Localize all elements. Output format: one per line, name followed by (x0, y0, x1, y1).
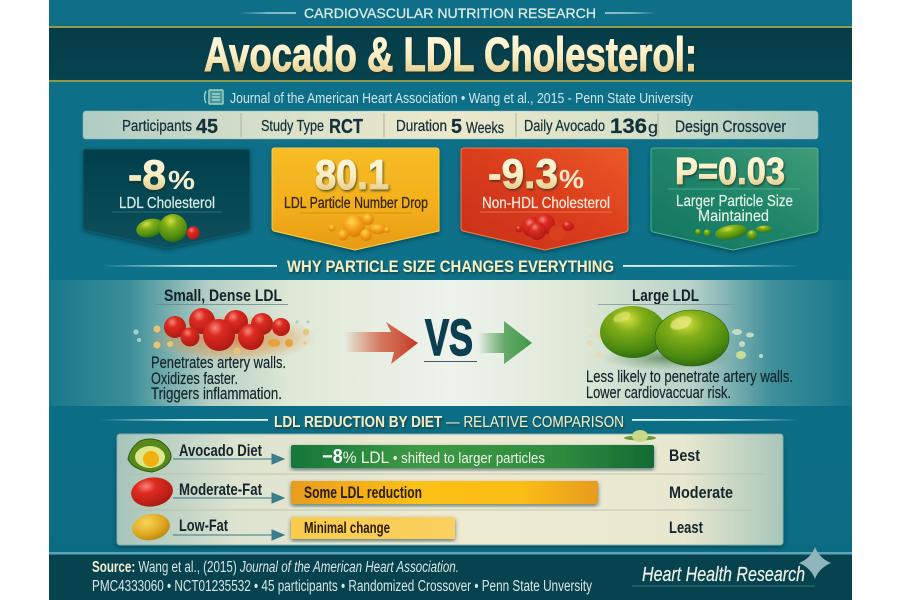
row: avocado diet: Avocado Diet (179, 441, 262, 460)
icon: sparkle (799, 547, 831, 579)
bar: avocado (291, 445, 654, 468)
bar: low-fat (291, 517, 455, 539)
stat: participants: Participants (122, 118, 192, 135)
card: non-HDL cholesterol: % (559, 164, 584, 194)
bar: avocado: −8% LDL • shifted to larger particles (322, 446, 545, 468)
small LDL description: Oxidizes faster. (151, 369, 238, 388)
icon: orange particles (328, 213, 390, 241)
small dense LDL (133, 286, 317, 403)
small LDL description: Penetrates artery walls. (151, 353, 286, 372)
kicker heading: CARDIOVASCULAR NUTRITION RESEARCH (304, 5, 596, 21)
small LDL description (151, 353, 286, 403)
arrow (173, 454, 284, 464)
section heading: LDL reduction: LDL REDUCTION BY DIET — RELATIVE COMPARISON (274, 414, 624, 431)
card: LDL particle number: 80.1 (315, 151, 389, 198)
card: non-HDL cholesterol: -9.3 (488, 150, 558, 197)
stat: daily avocado: 136 (610, 115, 647, 138)
large LDL (586, 286, 793, 402)
source text: Source: Wang et al., (2015) Journal of the American Heart Association. (92, 559, 459, 576)
stat: daily avocado (524, 115, 658, 138)
row: low-fat (130, 511, 703, 543)
icon: yellow oval (130, 511, 172, 543)
card: LDL cholesterol: LDL Cholesterol (119, 195, 215, 212)
stat: participants: 45 (196, 116, 218, 138)
card: LDL cholesterol: -8 (128, 151, 166, 198)
footer (49, 547, 852, 600)
title: Avocado & LDL Cholesterol: (204, 29, 697, 82)
bar: moderate (291, 481, 598, 504)
stat: study type: RCT (329, 116, 363, 138)
icon: green beans (695, 222, 772, 242)
large LDL: Large LDL (632, 286, 699, 305)
stat: duration: Weeks (466, 120, 504, 137)
icon: avocados (134, 214, 200, 242)
card: LDL cholesterol: % (168, 165, 195, 195)
icon: gem marker (624, 430, 656, 442)
small dense LDL: Small, Dense LDL (164, 286, 282, 305)
citation line: Journal of the American Heart Association • Wang et al., 2015 - Penn State University (230, 90, 693, 107)
large LDL description: Lower cardiovaccuar risk. (586, 383, 731, 402)
title band (49, 26, 852, 82)
arrow (173, 530, 284, 540)
card: larger particle size: Larger Particle Size (676, 193, 793, 210)
row: moderate-fat (129, 475, 733, 509)
card: larger particle size: Maintained (698, 208, 769, 225)
card: non-HDL cholesterol (461, 148, 628, 250)
icon: red particles (516, 214, 574, 241)
icon: small red particles (133, 308, 317, 362)
section heading: why particle size: WHY PARTICLE SIZE CHANGES EVERYTHING (287, 258, 614, 276)
card: larger particle size: P=0.03 (675, 151, 785, 193)
icon: journal (204, 90, 223, 104)
stat: participants (122, 116, 218, 138)
bar: low-fat: Minimal change (304, 520, 390, 537)
stats bar (83, 111, 818, 139)
arrow: red (345, 322, 418, 364)
card: non-HDL cholesterol: Non-HDL Cholesterol (482, 195, 610, 212)
arrow (173, 493, 284, 503)
stat: study type: Study Type (261, 118, 324, 135)
row: moderate-fat: Moderate-Fat (179, 480, 262, 499)
stat: daily avocado: Daily Avocado (524, 118, 605, 135)
stat: daily avocado: g (648, 118, 658, 137)
panel: diet comparison (117, 430, 783, 545)
card: LDL particle number: LDL Particle Number Drop (284, 195, 428, 212)
row: moderate-fat: Moderate (669, 483, 733, 502)
vs label: VS (425, 309, 473, 366)
small LDL description: Triggers inflammation. (151, 384, 282, 403)
card: LDL cholesterol (83, 149, 250, 248)
row: avocado diet: Best (669, 446, 700, 465)
arrow: green (478, 321, 532, 364)
icon: red oval (129, 475, 175, 509)
stat: duration: Duration (396, 118, 447, 135)
icon: avocado (128, 439, 171, 472)
large LDL description: Less likely to penetrate artery walls. (586, 367, 793, 386)
card: LDL particle number (272, 148, 439, 250)
brand: Heart Health Research (642, 564, 805, 586)
panel: particle comparison (49, 280, 852, 406)
stat: design: Design Crossover (675, 118, 786, 136)
source text: PMC4333060 • NCT01235532 • 45 participants • Randomized Crossover • Penn State Unversity (92, 578, 592, 595)
large LDL description (586, 367, 793, 402)
row: low-fat: Low-Fat (179, 516, 228, 535)
stat: duration (396, 116, 504, 138)
icon: large green particles (587, 306, 763, 371)
bar: moderate: Some LDL reduction (304, 483, 422, 502)
card: larger particle size (651, 148, 818, 250)
row: low-fat: Least (669, 518, 703, 537)
stat: duration: 5 (451, 116, 462, 138)
row: avocado diet (128, 439, 700, 472)
stat: study type (261, 116, 363, 138)
source text (92, 559, 592, 595)
